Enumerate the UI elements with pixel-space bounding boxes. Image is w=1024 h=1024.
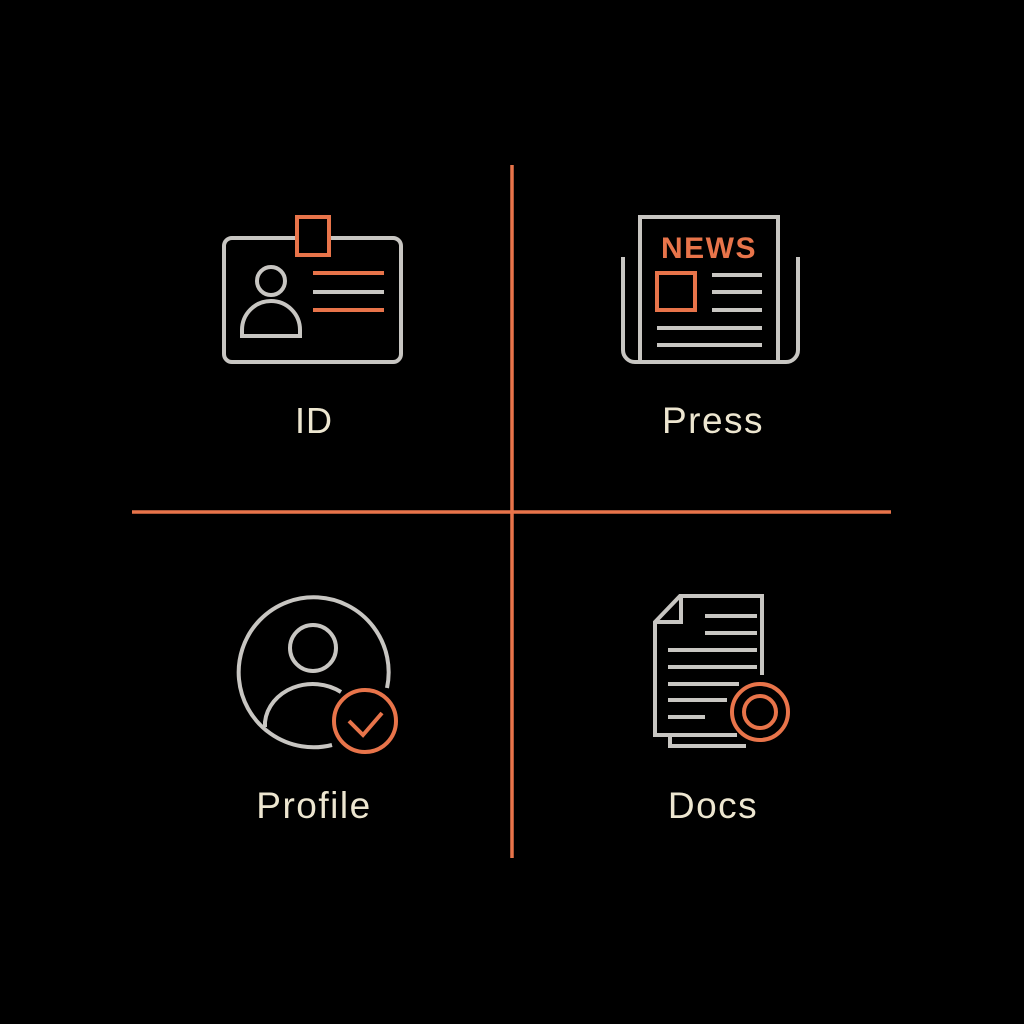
divider: vertical	[510, 165, 514, 858]
divider: horizontal	[132, 510, 891, 514]
icon: profile verified	[239, 597, 396, 752]
label: ID: ID	[295, 400, 333, 441]
icon: newspaper: NEWS	[661, 232, 757, 265]
icon: documents	[655, 596, 788, 746]
label: Press: Press	[662, 400, 764, 441]
icon: newspaper	[623, 217, 798, 362]
label: Docs: Docs	[668, 785, 758, 826]
label: Profile: Profile	[256, 785, 372, 826]
icon: ID card	[224, 217, 401, 362]
